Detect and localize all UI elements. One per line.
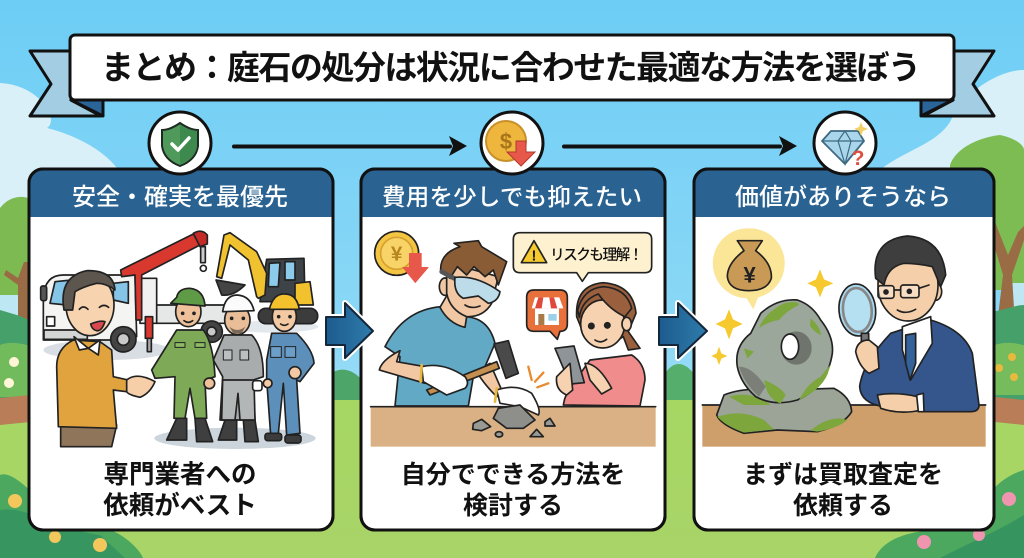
man with goggles: [379, 241, 539, 415]
stone with hole: [737, 300, 833, 403]
worker: green: [152, 288, 215, 442]
panel 2 caption: 自分でできる方法を: [401, 461, 625, 489]
panel 2 caption: 検討する: [463, 492, 563, 520]
banner plate: [70, 35, 954, 100]
step icon 3: diamond with question mark: [814, 112, 876, 174]
speech bubble: risk: [513, 233, 652, 281]
flow arrow 2: [562, 136, 797, 156]
magnifying glass: [837, 283, 879, 373]
title banner: [30, 35, 994, 116]
step icon 3: diamond with question mark: ?: [852, 147, 864, 170]
panel 3: value: [694, 169, 994, 530]
base stone: [717, 388, 852, 433]
speech bubble: risk: !: [532, 249, 536, 265]
panel 2 header: [361, 169, 665, 217]
crane truck: [41, 231, 228, 352]
title text: まとめ：庭石の処分は状況に合わせた最適な方法を選ぼう: [101, 49, 921, 86]
client man with sweater: [57, 271, 155, 447]
excavator: [216, 233, 318, 324]
panel 1 caption: 専門業者への: [103, 461, 257, 489]
panel 2 heading: 費用を少しでも抑えたい: [382, 184, 642, 210]
yen coin with down arrow: ¥: [391, 243, 403, 266]
money bag bubble: ¥: [744, 263, 757, 288]
right tree and hedges: [875, 135, 1024, 558]
panel 1: safety: [29, 169, 333, 530]
store icon: [527, 290, 567, 339]
ribbon: right tail: [923, 51, 994, 116]
panel 1 heading: 安全・確実を最優先: [72, 184, 288, 211]
panel 3 header: [694, 169, 994, 217]
panel 3 caption: まずは買取査定を: [743, 461, 943, 489]
process arrow 1: [326, 303, 373, 358]
panel 2 border: [361, 169, 665, 530]
table: [371, 407, 656, 447]
panel 3 border: [694, 169, 994, 530]
woman with smartphone: [555, 283, 645, 406]
step icon 2: coin with arrow: $: [500, 129, 512, 154]
illustration: stone appraisal: [702, 228, 986, 447]
worker: blue: [263, 294, 314, 443]
panel 3 caption: 依頼する: [793, 492, 893, 520]
panel 1 caption: 依頼がベスト: [103, 491, 257, 520]
process arrow 2: [659, 303, 707, 358]
appraiser man: [860, 236, 979, 412]
illustration: contractors and client: [41, 231, 318, 449]
gap hedges: [333, 370, 362, 400]
illustration: DIY man and woman: [371, 231, 656, 447]
panel 2: cost: [361, 169, 665, 530]
step icon 1: shield: [149, 112, 211, 174]
left tree and hedges: [0, 197, 143, 558]
rock and shards: [473, 367, 555, 437]
panel 1 border: [29, 169, 333, 530]
sparkles: [711, 269, 833, 365]
worker: gray: [213, 295, 263, 442]
money bag bubble: [713, 228, 785, 309]
panel 3 heading: 価値がありそうなら: [735, 184, 951, 211]
flow arrow 1: [232, 136, 467, 156]
panel 1 header: [29, 169, 333, 217]
table: [702, 405, 986, 447]
step icon 2: coin with arrow: [481, 112, 543, 174]
ribbon: left tail: [30, 51, 101, 116]
yen coin with down arrow: [375, 231, 428, 283]
speech bubble: risk: リスクも理解！: [550, 246, 643, 263]
